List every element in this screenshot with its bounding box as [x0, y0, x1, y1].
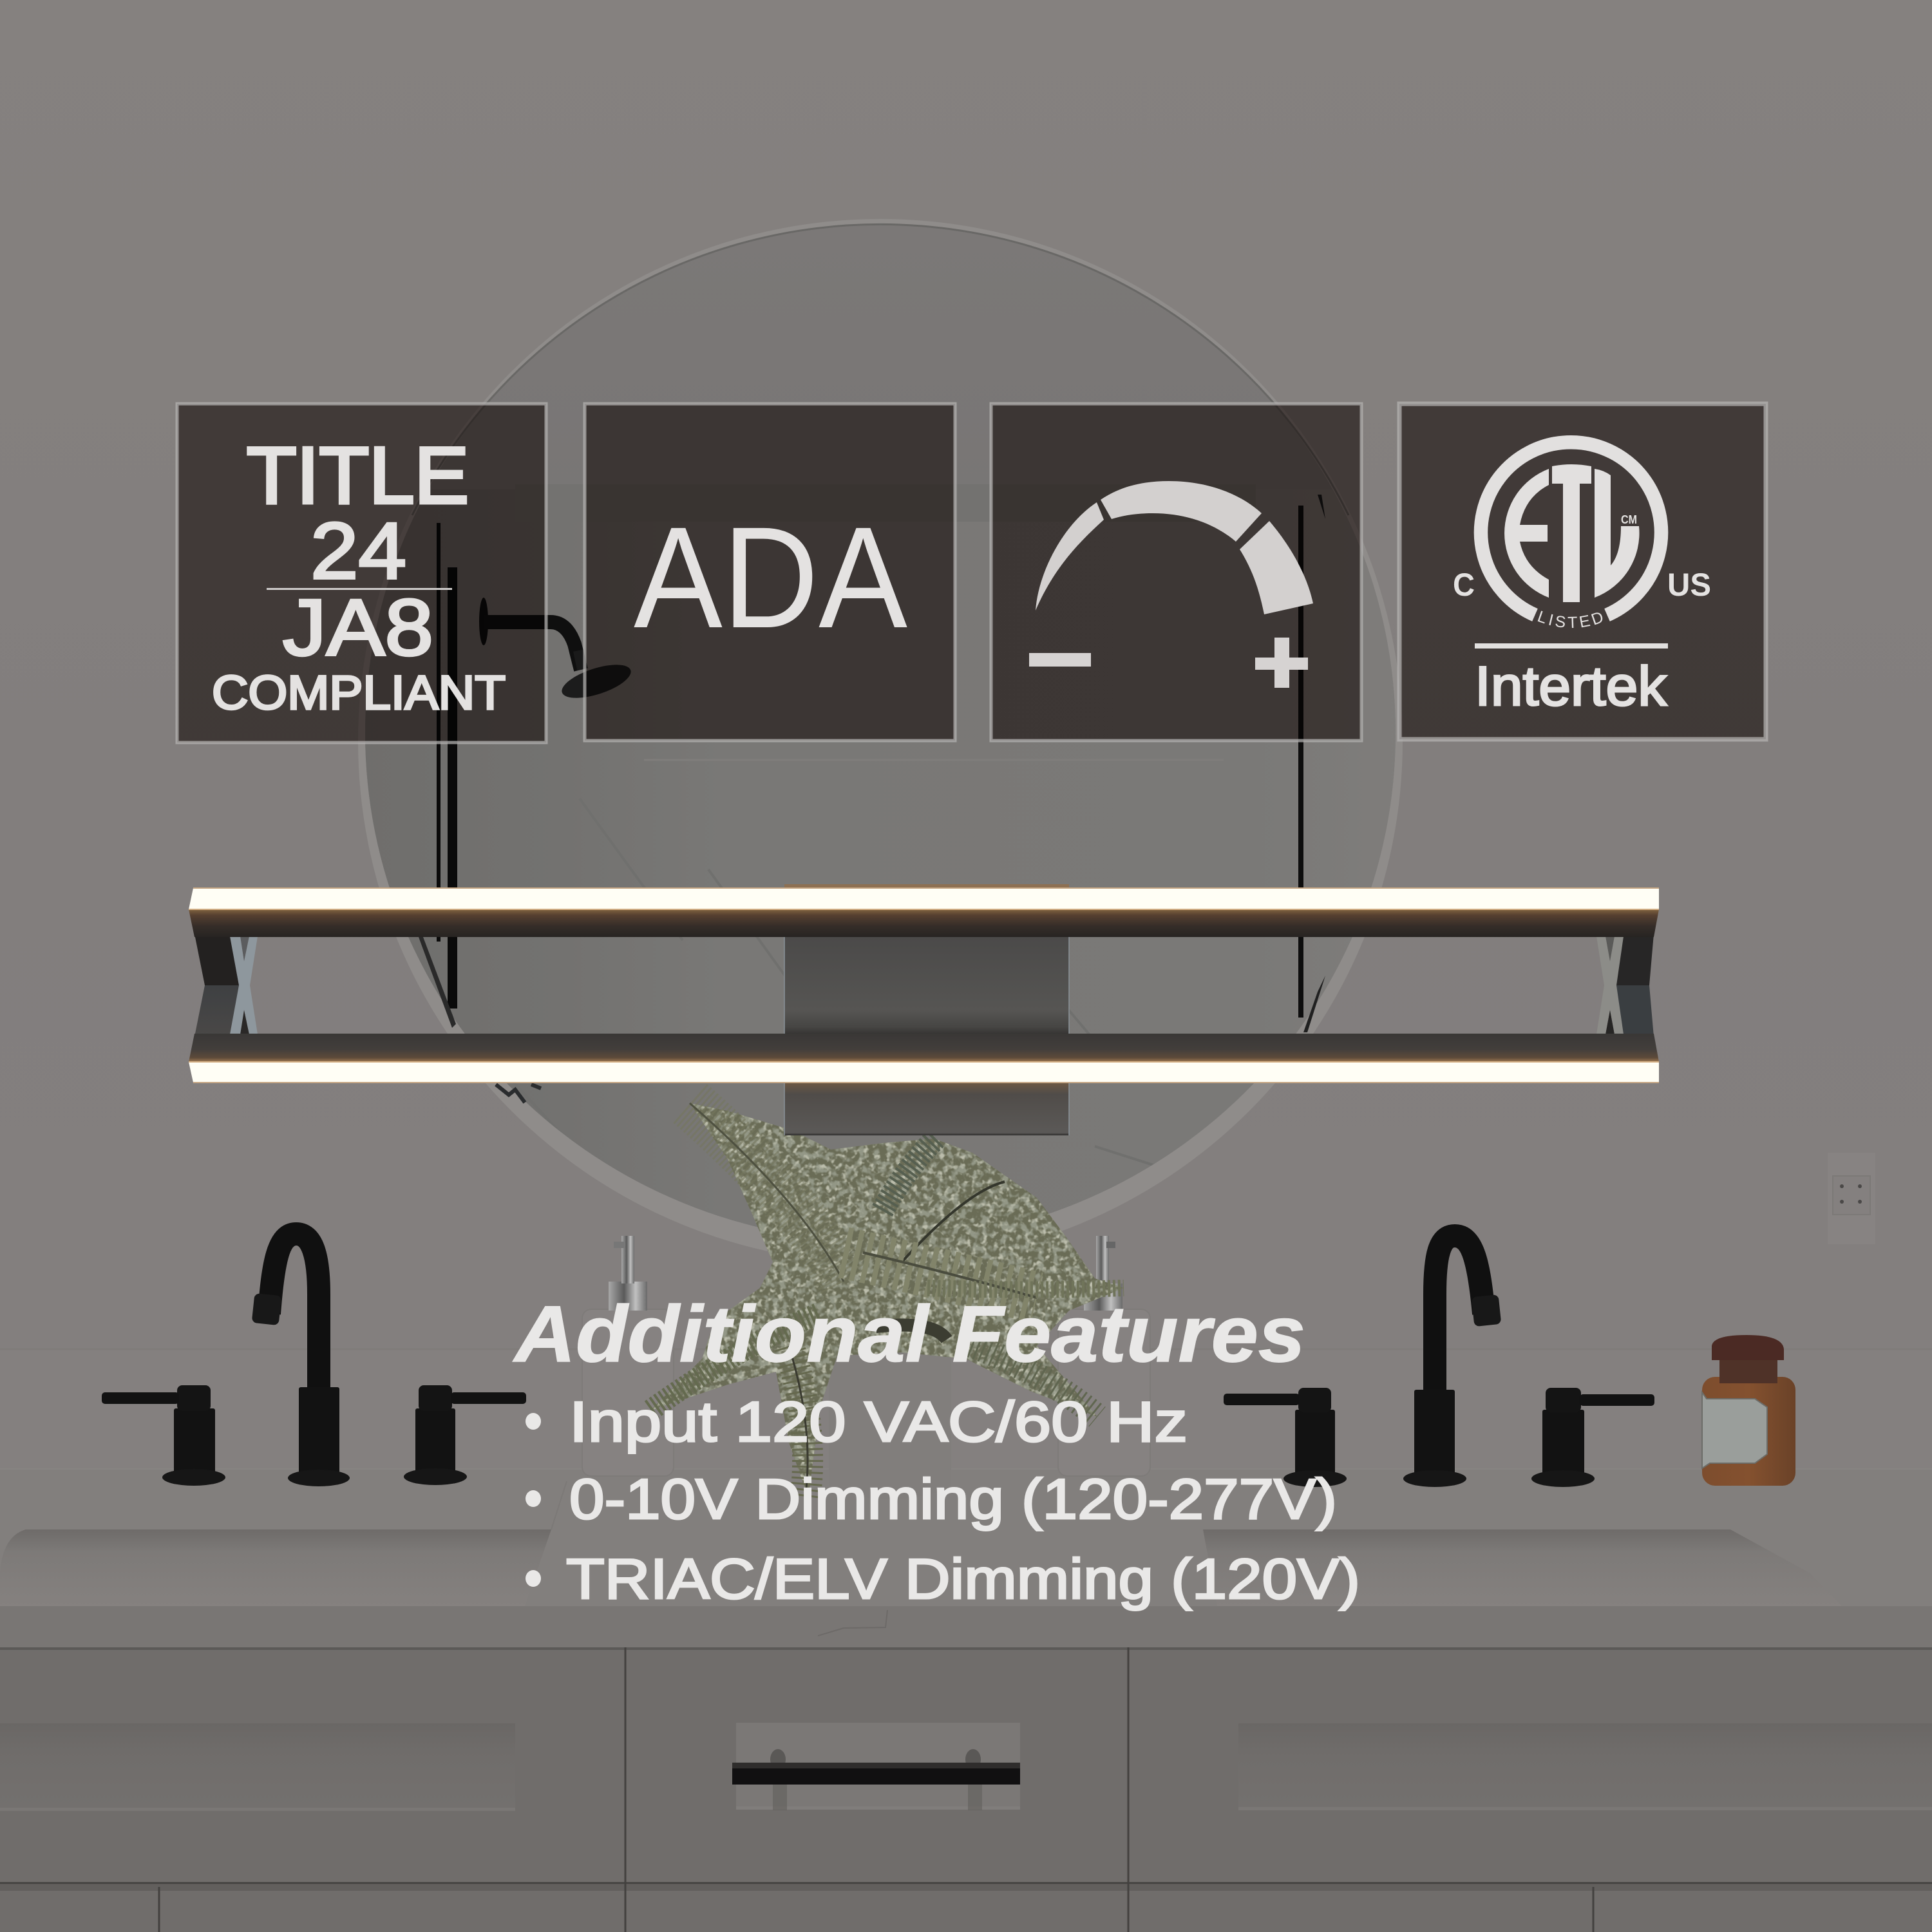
heading: JA8: JA8: [283, 583, 433, 672]
panel: Title 24 JA8 compliant: [177, 404, 546, 743]
label: Intertek: Intertek: [1475, 656, 1667, 717]
label: US: US: [1667, 567, 1711, 603]
bottom light strip: [189, 1061, 1659, 1083]
amber jar: [1702, 1335, 1795, 1486]
wall plate: [784, 884, 1069, 1135]
right faucet: [1224, 1236, 1654, 1487]
end cap right: [1613, 934, 1654, 985]
upper arm: [189, 909, 1659, 937]
icon: plus: [1255, 638, 1308, 688]
vanity cabinets: [0, 1647, 1932, 1932]
heading: TITLE: TITLE: [247, 431, 469, 520]
fern plant: [650, 1103, 1124, 1499]
panel: ETL listed Intertek: [1397, 402, 1768, 742]
panel: ADA: [585, 404, 955, 741]
label: LISTED: LISTED: [1538, 611, 1602, 628]
door recesses: [0, 1723, 515, 1808]
shower rails and shower head in mirror: [419, 495, 1325, 1103]
heading: Additional Features: [513, 1290, 1305, 1379]
bullet: 0-10V: 0-10V Dimming (120-277V): [569, 1467, 1337, 1531]
bullet: input: Input 120 VAC/60 Hz: [569, 1390, 1188, 1454]
drawer handle: [732, 1749, 1020, 1810]
heading: 24: 24: [310, 507, 406, 596]
soap dispensers: [582, 1236, 1150, 1476]
label: C: C: [1453, 567, 1475, 603]
label: CM: CM: [1621, 513, 1637, 526]
left faucet: [102, 1234, 526, 1486]
reflected ceiling and alcove: [365, 671, 1396, 1012]
divider lines: [0, 1884, 1932, 1891]
top light strip: [189, 887, 1659, 910]
icon: ETL mark: [1473, 435, 1668, 628]
panel: dimming: [991, 404, 1361, 741]
bullet: TRIAC/ELV: TRIAC/ELV Dimming (120V): [566, 1547, 1360, 1611]
right sink: [1203, 1530, 1842, 1606]
plant pot: [829, 1348, 951, 1499]
label: ADA: ADA: [634, 497, 907, 658]
icon: dimmer arc: [1036, 481, 1313, 614]
end cap left: [194, 934, 244, 985]
outlet plate: [1828, 1153, 1875, 1244]
text block: Additional Features: [513, 1290, 1360, 1611]
x brace right: [1596, 936, 1624, 1034]
left sink: [0, 1530, 551, 1606]
heading: COMPLIANT: COMPLIANT: [212, 666, 506, 719]
lower arm: [189, 1034, 1659, 1062]
icon: minus: [1029, 653, 1091, 667]
x brace left: [230, 936, 258, 1034]
product: linear LED vanity light: [189, 884, 1659, 1135]
back splash and counter top: [0, 1349, 1932, 1647]
round mirror: [354, 219, 1410, 1264]
